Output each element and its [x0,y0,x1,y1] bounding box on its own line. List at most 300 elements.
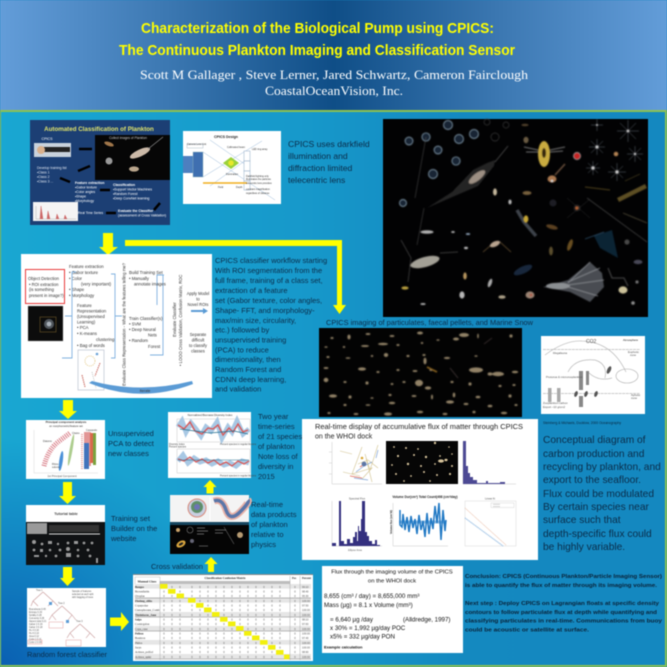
row names: Fleshug_cillio [135,599,153,603]
upper time series [177,419,250,442]
vertical evaluation label: Evaluate Class Representation - What are the features telling me? [122,262,126,386]
feature representation list: • PCA [77,325,89,330]
title [119,20,515,59]
feature lists: Aspect ratio 0.21 [29,620,47,623]
text: real-time data products label: of plankton [251,520,288,529]
matrix digits: 000000000000000 [163,641,296,645]
text: classifier workflow description: Shape- FFT, and morphology- [215,306,315,315]
text: classifier workflow description: max/min size, circularity, [215,316,296,325]
panel heading: on the WHOI dock [315,434,373,440]
text: classifier workflow description: and validation [215,384,261,394]
row shading and rules [135,584,311,659]
feature extraction list: • Shape [69,287,85,292]
circular data plot [188,499,206,517]
text: time series note: Two year [258,412,289,421]
matrix digits: 000000000000000 [163,622,296,626]
panel: flux calculation box [322,566,463,653]
percent correct column: 100.00 [302,655,310,659]
yellow focus diamond [223,157,239,169]
text: training set builder label: Builder on the [111,524,157,533]
train classifiers: • Deep Neural [129,327,156,332]
CPICS instrument photo [34,143,71,157]
chart: volume and total count time series: Volume Dur(cm³) Total Count(498 (cm³/day) [392,495,458,499]
feature lists: Hu 6 0.14 [29,633,40,635]
separate difficult classes: Separate [190,332,207,337]
time series legend: Diversity index [169,443,185,446]
text: conceptual diagram description: recycling by plankton, and [543,462,661,473]
feature lists: Gabor 2 0.19 [29,623,43,626]
row names: Actinos_spiki [135,655,151,659]
text: darkfield illumination note: diffraction limited [288,163,353,173]
text: conceptual diagram description: Flux could be modulated [543,489,654,500]
caption: diagram citation: Steinberg & Michaels, Ducklow, 2000 Oceanography [543,421,621,425]
row names: Copa_case [135,627,148,631]
diagram labels: zone [631,396,638,400]
feature lists: Color 1 0.11 [29,638,42,641]
percent correct column: 98.10 [302,618,309,622]
chart: log flux lines with legend: Linear fit [485,496,495,500]
chart: PCA scatter: solenia [52,466,60,469]
matrix digits: 000000000000000 [163,608,296,612]
separate difficult classes: to classify [189,343,208,348]
feature representation list: clustering [96,337,115,342]
slide evaluate text: Real Time Series [78,211,103,215]
small grazers [573,366,612,397]
text: conceptual diagram description: be highly variable. [543,542,625,553]
slide arrows [60,149,160,213]
feature representation list: Learning) [77,320,96,324]
text: classifier workflow description: CPICS classifier workflow starting [215,256,327,265]
text: classifier workflow description: (PCA) to reduce [215,346,269,354]
panel: classifier workflow diagram [21,254,212,398]
text: conceptual diagram description: By certain species near [543,502,649,513]
arrow: cross validation up [204,557,218,572]
iterate loop arrow [89,381,193,394]
light ray lines [203,140,275,200]
feature lists: Tree 1 [36,589,43,592]
text: classifier workflow description: dimensionality, then [215,355,281,364]
image: plankton collage [383,119,648,317]
chart: PCA scatter: Diatoms [43,440,53,443]
diagram labels: CO2 [586,339,596,345]
chart: volume and total count time series: Volume flux (cm³/d) [389,510,393,534]
text: conclusion and next step: classifying particulates in real-time. Communications from buoy [465,618,662,624]
lower time series [177,449,250,473]
brown chains and rods [585,174,647,242]
image: particulates and marine snow [319,328,522,417]
panel: real-time flux display [302,419,538,560]
diagram labels: Protozoa & microzooplankton [546,375,583,379]
carbon cycle arcs [545,341,626,379]
text: classifier workflow description: full frame, training of a class set, [215,276,323,285]
slide feature extraction: •Color angles [75,190,96,194]
design notes: Depth [236,186,243,189]
object detection box: Object Detection [28,276,60,281]
text: conceptual diagram description: export to the seafloor. [543,475,641,486]
design notes: Darkfield lighting only [246,175,270,178]
feature representation list: Feature [77,303,92,308]
panel: training set builder screenshot [26,505,105,565]
flux equations: = 6,640 µg /day [330,616,374,624]
feature lists: Entropy 0.33 [29,611,43,614]
text: PCA label: Unsupervised [108,429,154,438]
chart: PCA scatter: 1st Principal Component [47,474,77,478]
object detection box: • ROI extraction [29,282,59,287]
chart: log flux lines with legend [465,496,516,546]
title: The Continuous Plankton Imaging and Classification Sensor [119,42,515,59]
yellow diagonal cells [160,584,290,659]
feature lists: Area 0.12 [29,635,40,638]
slide time series chart [33,202,78,221]
train classifiers: • Random [129,338,148,343]
feature extraction list: (very important) [81,282,112,286]
feature representation list: • Bag of words [77,343,105,348]
matrix digits: 000000000000000 [163,594,296,598]
feature lists: with bagging of trees [72,596,94,599]
row names: Bongos [135,585,145,589]
separate difficult classes: difficult [192,338,205,342]
percent correct column: 100.00 [302,599,310,603]
diagram labels: Export ~10 g/cm2 [543,405,565,409]
percent correct column: 98.40 [302,590,309,594]
text: darkfield illumination note: telecentric lens [288,175,345,185]
feature lists: Hu 4 0.16 [29,630,40,632]
sine wave data plot [214,500,248,517]
matrix digits: 000000000000000 [163,632,296,636]
percent correct column: 100.00 [302,632,310,636]
chart: two-year time series: Percent species in regular blooms [220,474,257,478]
chart: particle trajectories [329,442,382,484]
label: cross validation: Cross validation [151,562,203,571]
feature lists: Tree 2 [58,602,65,605]
design notes: regardless of distance [246,192,270,195]
train classifiers: Train Classifier(s) [129,316,163,321]
header banner [0,0,667,111]
slide feature extraction: Feature extraction [75,181,104,185]
percent correct column: 100.00 [302,613,310,617]
flux equations: x5% = 332 µg/day PON [330,634,395,640]
row names: Cornicgalon [135,622,150,626]
train classifiers: Forest [148,344,161,349]
train classifiers: Nets [148,332,157,338]
affiliation: CoastalOceanVision, Inc. [265,84,403,98]
example note: Example calculation [324,644,363,650]
arrow: data products up to time series [204,480,216,494]
plankton thumbnails [175,527,243,549]
feature representation list: Representation [77,308,107,314]
LED array panel [244,151,250,190]
slide classification: •Random Forest [113,192,138,196]
percent correct column: 100.00 [302,627,310,631]
flux heading: on the WHOI dock [368,578,416,584]
lower left copepod [401,230,534,305]
blue brackets [62,272,164,358]
text: time series note: of plankton [258,442,295,451]
text: time series note: diversity in [258,462,293,471]
scatter: blue cluster [58,451,64,471]
percent correct column: 95.30 [302,594,309,598]
scatter: dense right clusters [82,432,96,470]
diagram labels: Atmosphere [623,338,639,342]
text: conceptual diagram description: Conceptual diagram of [543,435,646,446]
arrow: PCA down to training set [59,482,76,504]
percent correct column: 100.00 [302,608,310,612]
feature representation list: • K-means [77,331,97,336]
caption: particulates imaging: CPICS imaging of particulates, faecal pellets, and Marine Snow [326,318,534,327]
feature extraction list: Feature extraction [69,264,104,269]
apply model: to [196,296,200,302]
object detection box: present in image?) [29,293,64,298]
arrow: long yellow connector to particulate image [125,240,346,314]
panel: automated classification slide [30,120,170,225]
authors: Scott M Gallager , Steve Lerner, Jared Schwartz, Cameron Fairclough [140,68,529,82]
text: darkfield illumination note: CPICS uses darkfield [288,139,370,149]
slide title: Automated Classification of Plankton [44,126,154,133]
text: time series note: Note loss of [258,452,299,461]
apply model: Apply Model [187,291,209,296]
chart: two-year time series: Normalized Biomass Diversity Index [188,413,233,417]
table headers [135,576,311,584]
design title: CPICS Design [214,135,238,139]
tree connectors [49,602,69,623]
slide training list: •Class 2 [37,175,50,179]
panel: training set builder screenshot: Tutorial table [54,512,78,516]
slide classification: •Support Vector Machines [113,188,152,192]
feather creature [543,262,604,302]
flux equations: (Alldredge, 1997) [403,616,450,624]
feature representation list: (Unsupervised [77,314,105,319]
row names: Philos [135,641,143,645]
bubble organisms [399,120,479,207]
flux equations: 8,655 (cm³ / day) = 8,655,000 mm³ [324,593,419,600]
design notes: illuminates the particles [246,178,272,181]
diagram labels: Megafauna [553,351,567,355]
matrix digits: 000000000000000 [163,613,296,617]
text: conclusion and next step: is able to quantify the flux of matter through its imaging volume. [465,583,658,589]
slide training list: Develop training list [37,166,67,170]
panel: conceptual carbon diagram [541,336,645,414]
cross validation rotated label: • LOOO Cross Validation, Confusion Matrix, ROC [178,275,183,366]
text: conclusion and next step: Next step : Deploy CPICS on Lagrangian floats at specific density [465,601,659,607]
slide feature extraction: •Shape [75,194,86,198]
arrow: training set down to random forest [60,567,75,586]
matrix digits: 000000000000000 [163,636,296,640]
matrix digits: 000000000000000 [163,604,296,608]
decision trees [31,592,95,638]
yellow larva [524,141,565,167]
slide feature extraction: •Gabor texture [75,186,97,190]
matrix digits: 000000000000000 [163,590,296,594]
feature lists: Gabor 3 0.18 [29,626,43,629]
chart: PCA scatter: Chains [72,432,80,435]
matrix digits: 000000000000000 [163,655,296,659]
build training set: annotate images [134,282,166,286]
feature extraction list: • Color [69,276,83,281]
feature lists: Solidity 0.28 [29,614,42,617]
table headers: Manual Class [138,580,157,584]
text: conclusion and next step: could be acoustic or satellite at surface. [465,628,590,634]
design notes: telecentric lens provides [246,182,272,185]
design notes: Field [218,186,224,189]
text: classifier workflow description: extraction of a feature [215,286,288,295]
word bag sketch [78,350,104,390]
panel: classifier workflow diagram: Iterate [140,389,150,393]
mid creatures [493,124,590,256]
text: training set builder label: website [110,534,136,543]
row names: Ovoplas [135,594,146,598]
flux equations: Mass (µg) = 8.1 x Volume (mm³) [324,602,413,609]
arrow: random forest to confusion matrix [110,612,129,631]
row names: Jacys [135,646,142,650]
text: classifier workflow description: With ROI segmentation from the [215,266,322,275]
flux equations: x 30% = 1,992 µg/day POC [330,625,406,632]
text: classifier workflow description: set (Gabor texture, color angles, [215,296,322,305]
percent correct column: 97.50 [302,604,309,608]
text: classifier workflow description: CDNN deep learning, [215,375,286,384]
chart: PCA scatter: Principal component analysis [46,420,87,424]
text: training set builder label: Training set [111,514,151,523]
caption: random forest classifier: Random forest classifier [27,650,108,659]
text: time series note: 2015 [258,472,275,481]
text: time series note: of 21 species [258,432,302,441]
diagram labels: Aphotic [631,393,641,397]
title: Characterization of the Biological Pump using CPICS: [141,20,494,37]
ROI image [28,306,63,341]
panel: real-time data products image [170,495,249,554]
blue arrow to novel ROIs [191,308,208,314]
percent correct column: 100.00 [302,646,310,650]
table headers: Classification Confusion Matrix [204,576,246,580]
train classifiers: • SVM [129,322,141,326]
diagram labels: Euphotic [628,350,639,354]
slide classification: Classification [113,183,135,187]
feature lists: Color 2 0.09 [29,641,42,644]
text: conclusion and next step: contours to follow particulate flux at depth while quantifying and [465,610,657,616]
text: classifier workflow description: Random Forest and [215,365,281,374]
time series legend: Percent species in regular blooms [220,443,257,446]
design notes: constant magnification [246,188,270,191]
row names: Brownfields [135,590,150,594]
radiolarian stars [586,119,643,181]
row names: Bonitrox [135,636,146,640]
camera block [183,144,203,177]
chart: PCA scatter: on morphometric/feature set [49,424,83,428]
feature extraction list: • Gabor texture [69,270,99,275]
evaluate classifier rotated label: Evaluate Classifier [172,302,177,337]
sinking particle columns [548,371,589,407]
slide plankton image: Collect images of Plankton [109,136,147,140]
panel heading: Real-time display of accumulative flux of matter through CPICS [315,424,523,431]
text: conceptual diagram description: surface such that [543,515,621,526]
chart: PCA scatter: Rhizo- [52,463,59,466]
slide evaluate text: (assessment of Cross Validation) [118,214,166,218]
flux heading: Flux through the imaging volume of the CPICS [331,570,453,576]
build training set: Build Training Set [129,270,163,275]
text: conceptual diagram description: depth-specific flux could [543,529,652,540]
text: classifier workflow description: etc.) followed by [215,326,269,334]
matrix digits: 000000000000000 [163,618,296,622]
matrix digits: 000000000000000 [163,650,296,654]
scatter: green cluster [67,434,75,466]
feature lists: selected at each split [72,593,94,596]
table: confusion matrix [133,574,313,661]
chart: volume and total count time series [389,495,458,546]
matrix digits: 000000000000000 [163,599,296,603]
chart: flux histogram: Ellipse Area [348,548,362,552]
percent correct column: 97.60 [302,622,309,626]
slide evaluate text: Evaluate the Classifier [118,209,154,213]
design notes: Camera Lens Unit [187,143,207,146]
bacteria ellipse [616,369,638,383]
separate difficult classes: classes [191,348,205,354]
orange depth-of-field bar [203,182,247,184]
apply model: Novel ROIs [188,302,208,307]
text: real-time data products label: physics [251,540,276,549]
arrow: workflow down to PCA [59,400,77,419]
arrow: slide down to workflow [99,233,118,255]
matrix digits: 000000000000000 [171,585,296,589]
percent correct column: 100.00 [302,641,310,645]
diagram labels: Zooplankton carbon [543,401,568,405]
slide training list: •Class 3 ... [37,180,53,184]
feature extraction list: • Morphology [69,293,95,298]
row names: Salps [135,618,142,622]
feature lists: Roundness 0.45 [29,609,46,611]
image: live particle frame [386,441,458,484]
row names: Pelleas [135,632,144,636]
text: time series note: time-series [258,422,295,431]
percent correct column: 99.10 [302,585,309,589]
red plankton spot [573,152,581,160]
diagram labels: zone [630,353,637,357]
scatter: red arc [44,433,70,466]
chart: PCA scatter: Copepods [86,429,98,432]
design notes: LED ring array [252,148,268,151]
text: conceptual diagram description: carbon production and [543,449,645,460]
text: real-time data products label: data products [251,510,297,519]
feature lists: Tree 3 [76,620,83,623]
matrix digits: 000000000000000 [163,627,296,631]
row names: Copepodae [135,604,149,608]
large shrimp [415,137,508,245]
feature lists: Sample of features [72,590,92,593]
chart: flux histogram: Spectral Flux [349,496,366,500]
faint bubbles [484,119,509,141]
atmosphere and ocean lines [543,350,640,394]
table headers: Percent [302,577,311,580]
design notes: Illumination [226,173,239,176]
row names: Actinos_polfod [135,650,154,654]
slide classification: •Deep ConvNet learning [113,196,150,200]
time series legend: Percent species [169,446,187,448]
design notes: Collimated beam [227,146,245,149]
table headers: Pos [292,577,297,580]
slide feature extraction: •Morphology [75,199,94,203]
chart: PCA scatter [26,420,105,479]
object detection box: (is something [29,287,55,292]
object detection box [26,270,64,304]
text: real-time data products label: Real-time [251,500,283,509]
panel: CPICS optical design [183,131,281,204]
chart: two-year time series [168,412,257,478]
percent correct column: 97.40 [302,636,309,640]
percent correct column: 98.90 [302,650,309,654]
text: darkfield illumination note: illumination and [288,151,348,161]
build training set: • Manually [129,276,150,281]
matrix digits: 000000000000000 [163,646,296,650]
slide training list: •Class 1 [37,170,50,174]
chart: flux histogram [332,496,382,552]
